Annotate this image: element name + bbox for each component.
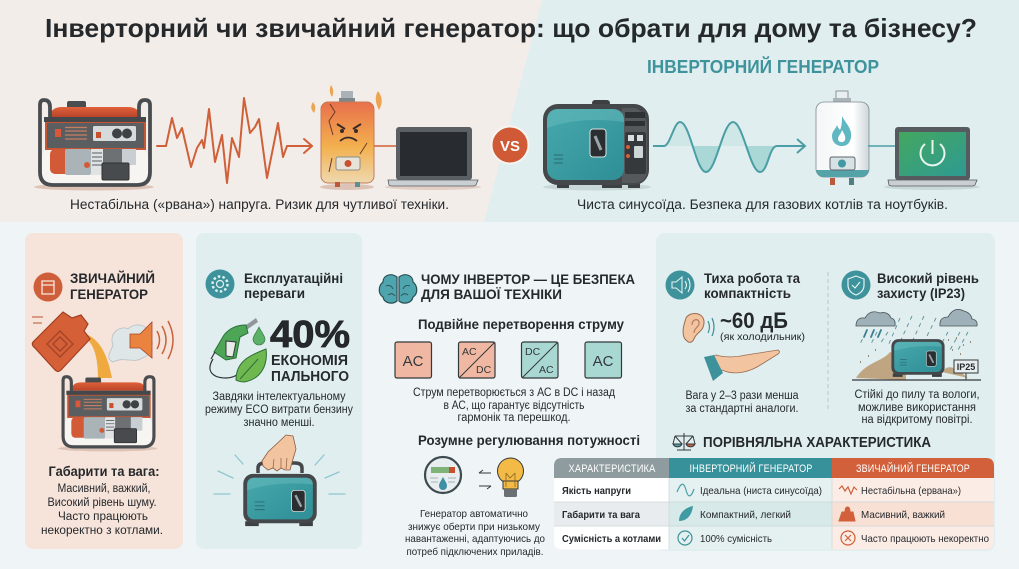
text: regulation description: потреб підключених приладів. [406,546,544,558]
heading: operating advantages [244,271,343,301]
heading: protection level [877,271,979,301]
icon: generator in rain and dust [852,309,981,380]
text: protection description: на відкритому повітрі. [862,414,972,426]
row labels: Якість напруги [562,485,631,497]
text: conversion description [413,387,615,424]
divider [827,272,829,410]
conventional column [839,485,989,545]
diagram: conversion boxes: DC [525,346,541,358]
header labels [568,462,970,475]
text: size and weight: Габарити та вага: [48,464,160,479]
heading: why inverter is safe: ЧОМУ ІНВЕРТОР — ЦЕ БЕЗПЕКА [421,272,635,287]
icon: sound badge [666,270,694,300]
heading: conventional generator: ЗВИЧАЙНИЙ [70,271,155,286]
caption: inverter: Чиста синусоїда. Безпека для газових котлів та ноутбуків. [577,197,948,212]
panel: operating advantages [196,233,362,549]
icon: small conventional generator [58,377,157,451]
stat: fuel saving: ЕКОНОМІЯ [271,353,348,369]
inverter column [677,484,822,545]
icon: file badge [34,272,62,302]
icon: loudspeaker [130,321,173,359]
stat: fuel saving [270,314,350,385]
badge: VS: VS [500,138,520,155]
icon: ear [683,313,714,342]
header labels: ІНВЕРТОРНИЙ ГЕНЕРАТОР [690,462,812,475]
icon: working laptop [884,127,980,190]
heading: conventional generator [70,271,155,302]
text: size and weight [41,464,163,537]
stat: fuel saving: 40% [270,314,350,356]
icon: hand carrying generator [214,435,345,526]
panel: quiet and protected [656,233,995,551]
text: protection description: можливе використання [858,402,976,414]
table: comparison [554,458,994,550]
heading: quiet operation: Тиха робота та [704,271,800,286]
row labels [562,485,661,545]
header labels: ХАРАКТЕРИСТИКА [568,463,656,475]
stat: fuel saving: ПАЛЬНОГО [271,369,349,385]
heading: inverter generator: ІНВЕРТОРНИЙ ГЕНЕРАТОР [647,56,879,77]
heading: operating advantages: Експлуатаційні [244,271,343,286]
caption: conventional: Нестабільна («рвана») напруга. Ризик для чутливої техніки. [70,197,449,212]
chart: pure sine wave [653,122,805,172]
text: regulation description: навантаженні, адаптуючись до [405,533,545,545]
icon: gear badge [206,270,234,298]
icon: conventional generator [34,100,154,190]
icon: overheated boiler [311,85,382,190]
header labels: ЗВИЧАЙНИЙ ГЕНЕРАТОР [856,462,970,475]
heading: why inverter is safe [421,272,635,302]
icon: safe boiler [816,91,869,185]
text: size and weight: Масивний, важкий, [58,483,150,495]
icon: brain [379,275,417,303]
icon: dark laptop [385,127,481,190]
panel: conventional generator [25,233,183,549]
heading: quiet operation [704,271,800,301]
text: weight [686,390,799,415]
text: conversion description: гармонік та перешкод. [458,412,570,424]
heading: protection level: Високий рівень [877,271,979,286]
text: protection description: Стійкі до пилу та вологи, [854,389,980,401]
row labels: Сумісність а котлами [562,533,661,545]
heading: smart power regulation: Розумне регулювання потужності [418,432,640,448]
stat: noise level: ~60 дБ [720,308,788,333]
icon: fuel nozzle and leaf [210,318,266,382]
icon: exhaust cloud [109,325,152,362]
text: eco mode: режиму ECO витрати бензину [205,404,353,416]
conventional column: Часто працюють некоректно [861,533,989,545]
background: conventional hero side [0,0,560,222]
heading: protection level: захисту (IP23) [877,286,965,301]
heading: why inverter is safe: ДЛЯ ВАШОЇ ТЕХНІКИ [421,287,562,302]
diagram: conversion boxes [395,342,622,378]
text: conversion description: в АС, що гарантує відсутність [444,400,585,412]
icon: scales [673,433,695,450]
stat: noise level [720,308,805,343]
text: regulation description: знижує оберти при низькому [408,521,541,533]
text: regulation description: Генератор автоматично [420,508,528,520]
diagram: conversion boxes: AC [462,346,477,358]
icon: generator in rain and dust: IP25 [957,362,975,372]
text: weight: Вага у 2–3 рази менша [686,390,799,402]
text: protection description [854,389,980,426]
text: eco mode: Завдяки інтелектуальному [212,391,346,403]
text: eco mode: значно менші. [244,417,314,429]
text: size and weight: Високий рівень шуму. [48,497,156,509]
inverter column: Компактний, легкий [700,509,791,521]
row labels: Габарити та вага [562,509,640,521]
icon: inverter generator [543,100,651,190]
connector: boiler to laptop [374,145,396,147]
heading: operating advantages: переваги [244,286,305,301]
icon: open hand [704,350,780,381]
text: weight: за стандартні аналоги. [686,403,798,415]
icon: shield badge [842,270,870,300]
heading: conventional generator: ГЕНЕРАТОР [70,287,148,302]
diagram: conversion boxes: AC [403,353,424,370]
heading: quiet operation: компактність [704,286,791,301]
text: regulation description [405,508,545,558]
text: size and weight: Часто працюють [58,511,148,523]
heading: comparison: ПОРІВНЯЛЬНА ХАРАКТЕРИСТИКА [703,434,931,451]
text: eco mode [205,391,353,429]
badge: VS [492,126,528,164]
inverter column: Ідеальна (ниста синусоїда) [700,485,822,497]
connector: boiler to laptop [868,145,896,147]
heading: double conversion: Подвійне перетворення струму [418,316,624,332]
conventional column: Нестабільна (ервана») [861,485,961,497]
icon: meter and bulb [425,457,524,497]
diagram: conversion boxes: AC [593,353,614,370]
icon: fuel can pouring [32,312,112,378]
title: Інверторний чи звичайний генератор: що обрати для дому та бізнесу? [45,13,977,43]
diagram: conversion boxes: AC [539,364,554,376]
inverter column: 100% сумісність [700,533,772,545]
text: size and weight: некоректно з котлами. [41,525,163,537]
stat: noise level: (як холодильник) [720,331,805,343]
diagram: conversion boxes: DC [476,364,492,376]
text: conversion description: Струм перетворюється з АС в DC і назад [413,387,615,399]
chart: unstable voltage wave [157,98,312,183]
conventional column: Масивний, важкий [861,509,945,521]
background: inverter hero side [484,0,1019,222]
